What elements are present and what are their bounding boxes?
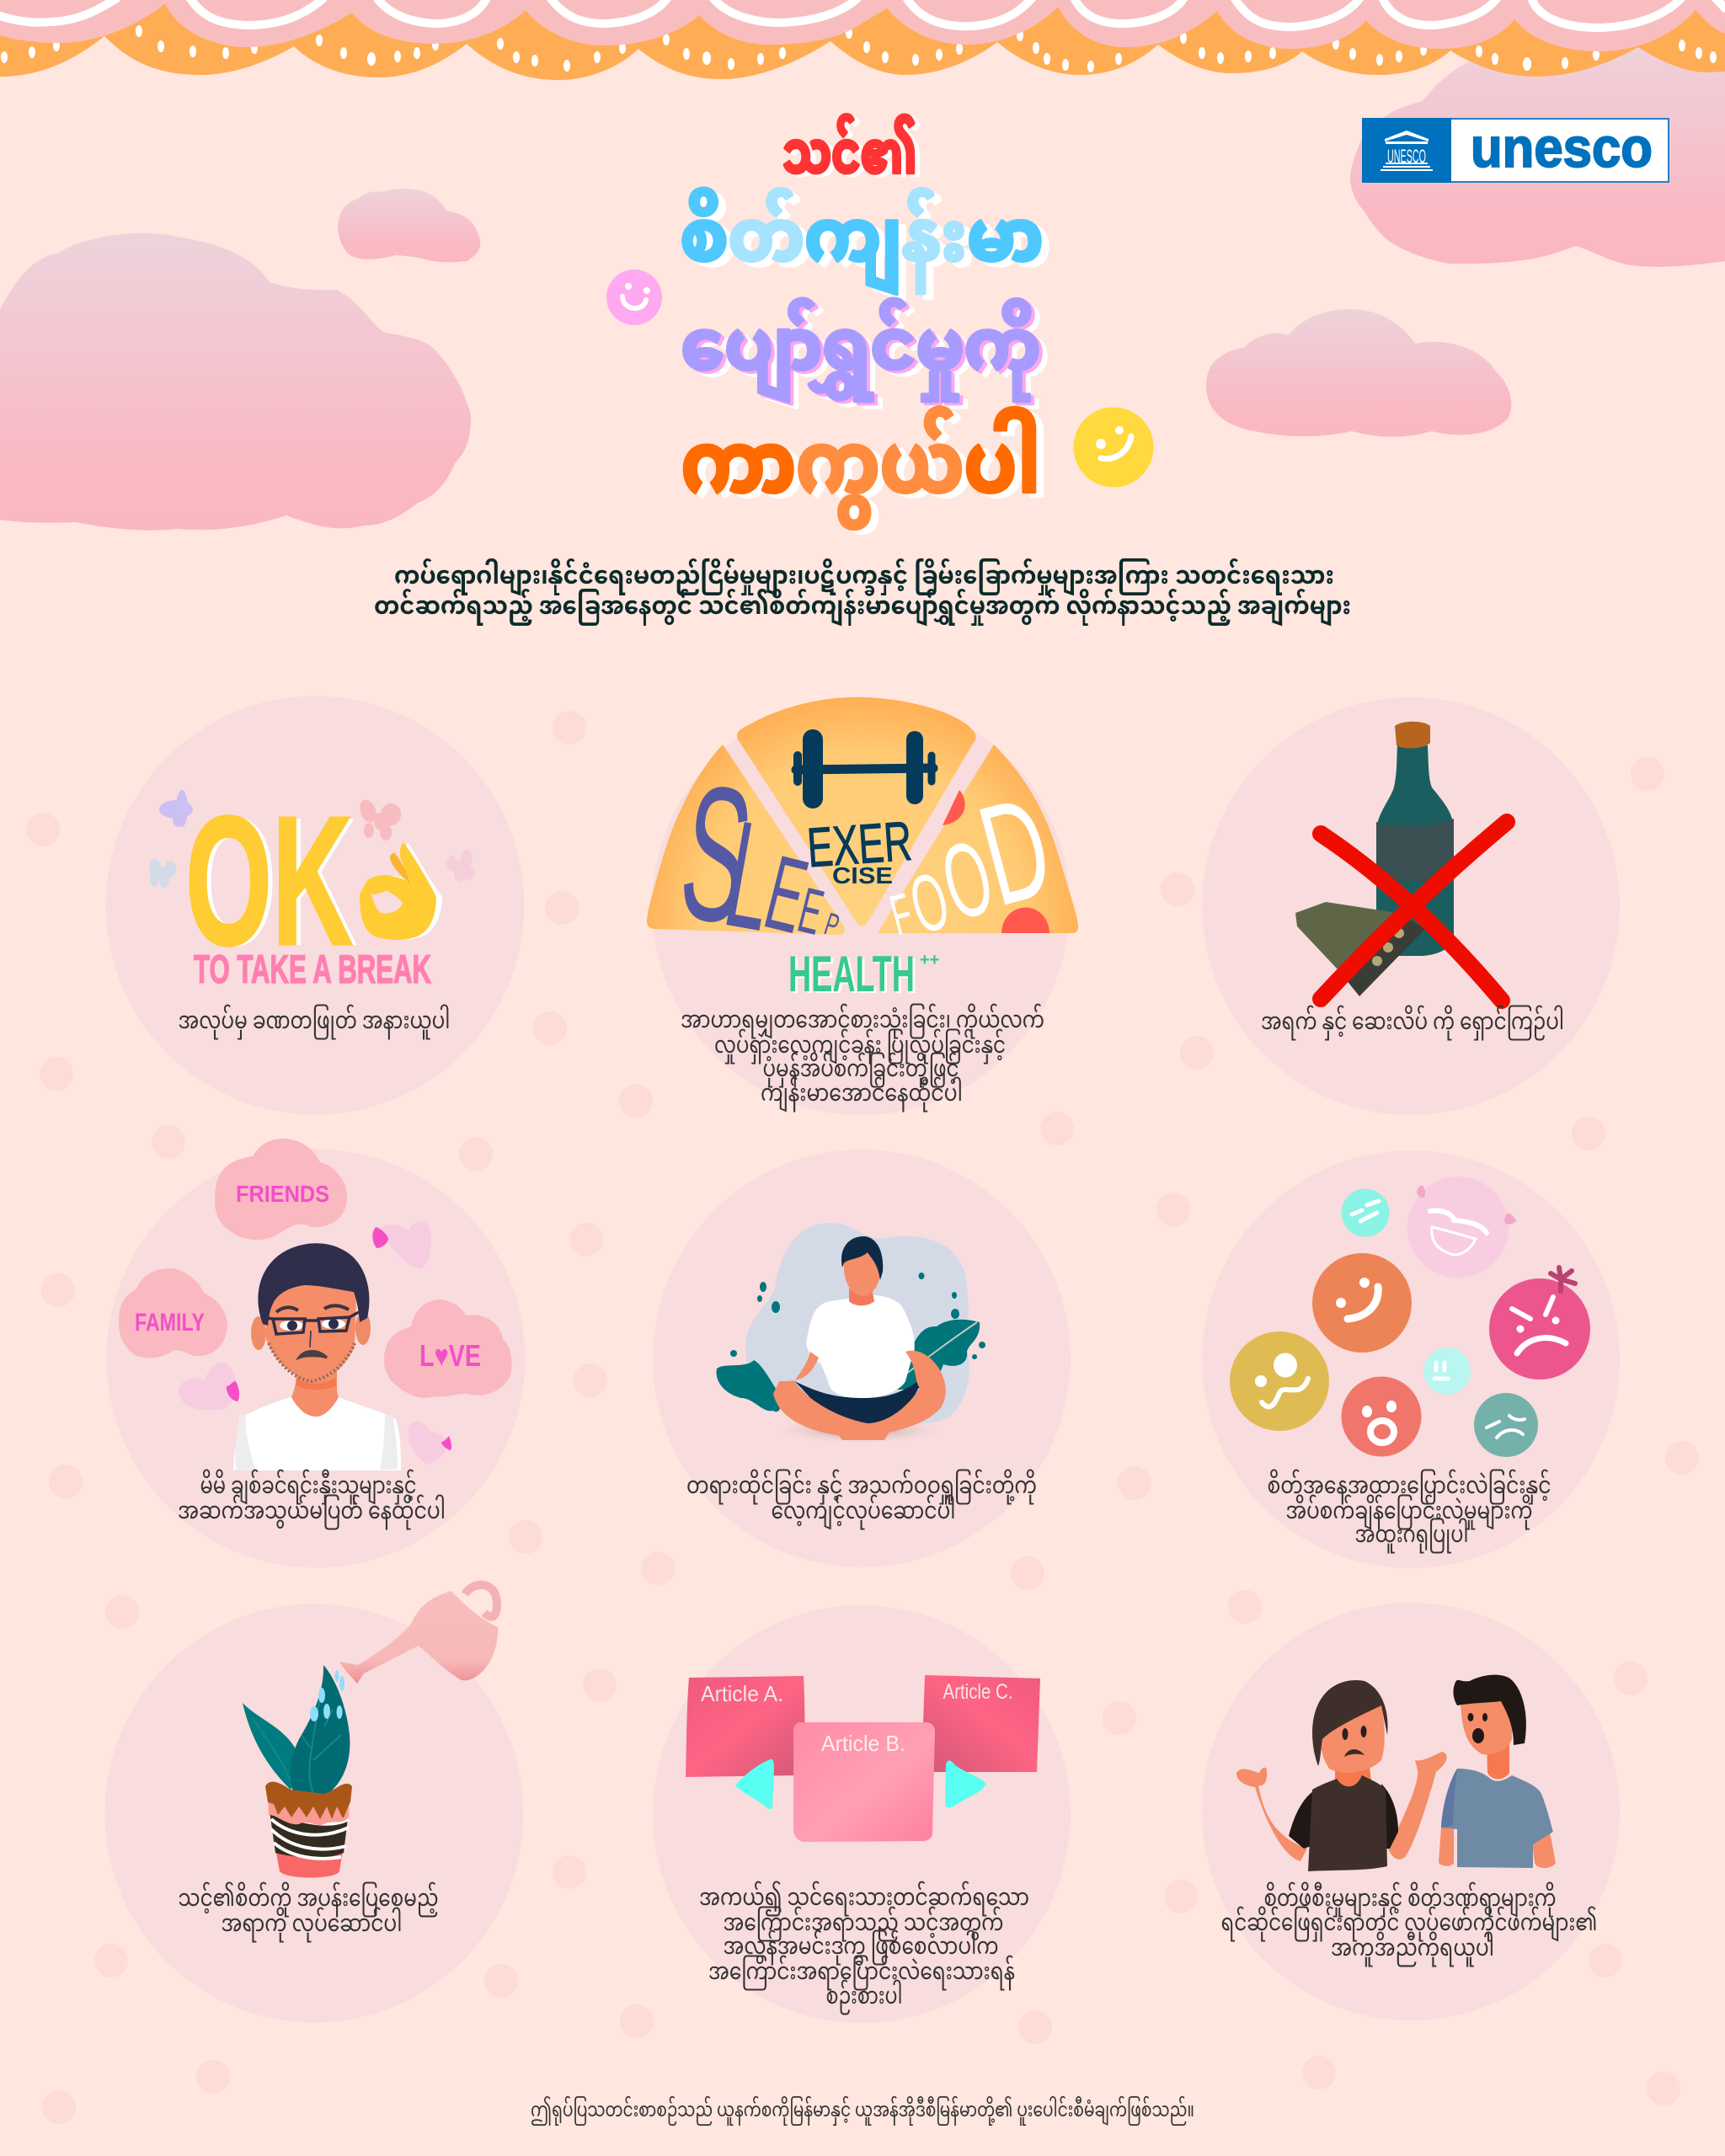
emoji: orange smile [1312,1253,1412,1353]
caption: အရာကို လုပ်ဆောင်ပါ [221,1901,403,1952]
icon: watering can [339,1585,498,1684]
cloud: family: FAMILY [135,1309,205,1337]
caption: ကျန်းမာအောင်နေထိုင်ပါ [761,1070,963,1122]
icon: ok hand [360,842,442,940]
header: orange scalloped bunting [0,0,1725,80]
caption: အိပ်စက်ချိန်ပြောင်းလဲမှုများကို [1285,1488,1533,1540]
illustration: meditating person [717,1223,985,1444]
panel: meditation [653,1150,1071,1567]
OK lettering: OK [185,779,353,984]
title line 4: ကာကွယ်ပါ [681,381,1041,564]
card: article C: Article C. [943,1680,1012,1704]
torso [806,1295,915,1398]
icon: dumbbell [796,739,933,798]
cloud: top right [1350,34,1725,267]
cloud: love [384,1299,512,1398]
emoji: teal sad [1474,1393,1538,1457]
card: article A: Article A. [701,1681,783,1706]
icon: striped pot [265,1782,352,1878]
food lettering [884,766,1066,951]
title line 3: ပျော်ရွှင်မှုကို [689,283,1049,435]
caption: သင့်၏စိတ်ကို အပန်းပြေစေမည့် [179,1876,438,1927]
panel: seek colleague support [1202,1603,1620,2020]
neck [849,1289,874,1305]
pie: sleep wedge [647,744,845,935]
sleep lettering: P [820,906,843,944]
title line 3: ပျော်ရွှင်မှုကို [684,280,1044,432]
cloud: large left [0,233,471,531]
caption [178,1463,446,1540]
caption: အကြောင်းအရာသည် သင့်အတွက် [723,1900,1004,1951]
panel: avoid alcohol and tobacco [1202,697,1620,1115]
food lettering: D [964,766,1066,937]
sleep lettering [670,744,843,965]
caption: အကူအညီကိုရယူပါ [1331,1925,1494,1977]
panel: change assignment [653,1605,1071,2025]
card: article B: Article B. [821,1731,905,1756]
caption: စိတ်အနေအထားပြောင်းလဲခြင်းနှင့် [1267,1463,1551,1514]
emoji: angry pink [1489,1267,1590,1380]
caption: အလွန်အမင်းဒုက္ခ ဖြစ်စေလာပါက [723,1924,999,1975]
caption: အာဟာရမျှတအောင်စားသုံးခြင်း၊ ကိုယ်လက် [681,997,1044,1049]
health lettering: HEALTH [788,946,915,1002]
caption: အကယ်၍ သင်ရေးသားတင်ဆက်ရသော [699,1875,1029,1926]
caption [1221,1876,1597,1977]
caption: အကြောင်းအရာပြောင်းလဲရေးသားရန် [708,1949,1015,2000]
cloud: friends: FRIENDS [236,1181,329,1207]
icon: hearts [179,1221,451,1464]
emoji: pink laughing [1407,1177,1516,1278]
footer: ဤရုပ်ပြသတင်းစာစဉ်သည် ယူနက်စကိုမြန်မာနှင့် ယူအန်အိုဒီစီမြန်မာတို့၏ ပူးပေါင်းစီမံချက်ဖြစ်သည်။ [531,2089,1194,2134]
icon: temple: UNESCO [1387,147,1426,167]
health lettering: ++ [920,951,939,969]
exercise lettering [805,809,914,889]
title [681,98,1051,568]
caption: လေ့ကျင့်လုပ်ဆောင်ပါ [772,1488,955,1540]
caption [1267,1463,1551,1563]
arrow: left [735,1759,774,1809]
water drops [310,1670,344,1721]
sleep lettering: S [670,744,763,965]
exercise lettering: EXER [805,809,914,878]
caption: အလုပ်မှ ခဏတဖြုတ် အနားယူပါ [179,998,450,1049]
panel: do what relaxes you [104,1585,524,2023]
cloud: small upper middle [338,189,480,262]
sleep lettering: E [755,833,818,955]
icon: cigarette pack [1295,902,1425,996]
arms and legs [773,1351,946,1436]
health lettering: HEALTH [791,947,917,1004]
title line 3: ပျော်ရွှင်မှုကို [681,277,1041,430]
pie: exercise wedge [737,697,976,926]
panel: take a break [106,696,524,1115]
wordmark: unesco [1471,116,1653,179]
caption: ရင်ဆိုင်ဖြေရှင်းရာတွင် လုပ်ဖော်ကိုင်ဖက်များ၏ [1221,1900,1597,1951]
panel: healthy lifestyle [647,697,1078,1122]
caption: အရက် နှင့် ဆေးလိပ် ကို ရှောင်ကြဉ်ပါ [1261,999,1564,1050]
title line 1: သင်၏ [782,98,917,222]
sleep lettering: L [714,789,785,963]
subtitle [374,550,1351,636]
caption: လှုပ်ရှားလေ့ကျင့်ခန်း ပြုလုပ်ခြင်းနှင့် [714,1022,1006,1074]
title line 1: သင်၏ [788,100,922,225]
card: article B [793,1722,935,1842]
sleep lettering: E [792,874,830,948]
illustration: woman [1236,1680,1447,1871]
caption: စိတ်ဖိစီးမှုများနှင့် စိတ်ဒဏ်ရာများကို [1263,1876,1557,1927]
title line 2: စိတ်ကျန်းမာ [687,173,1051,327]
emoji: coral surprised [1341,1376,1422,1457]
card: article C [921,1675,1040,1772]
cloud: friends [215,1139,347,1240]
caption: ပုံမှန်အိပ်စက်ခြင်းတို့ဖြင့် [763,1046,959,1097]
header: pink scallops [0,0,1725,51]
OK lettering: OK [190,780,358,985]
head [844,1239,881,1296]
leaf right [892,1320,980,1390]
icon: bottle [1376,722,1454,956]
cloud: right middle [1206,309,1511,437]
logo: UNESCO [1362,116,1669,183]
icon: butterflies [149,790,474,888]
food lettering: O [901,856,958,951]
food lettering: F [884,880,919,948]
subtitle: တင်ဆက်ရသည့် အခြေအနေတွင် သင်၏စိတ်ကျန်းမာပျော်ရွှင်မှုအတွက် လိုက်နာသင့်သည့် အချက်များ [374,580,1351,636]
caption: မိမိ ချစ်ခင်ရင်းနှီးသူများနှင့် [200,1463,416,1514]
caption: အဆက်အသွယ်မပြတ် နေထိုင်ပါ [178,1488,446,1540]
caption [179,1876,438,1952]
cloud: family [119,1268,227,1358]
panel: mood changes [1202,1150,1620,1568]
emoji: teal dashes [1341,1189,1390,1236]
header dots [1,25,1717,72]
tagline: TO TAKE A BREAK [194,947,431,991]
emoji: pale neutral [1423,1348,1471,1395]
exercise lettering: CISE [832,862,893,889]
background dots [26,711,1699,2124]
emoji: yellow wavy [1230,1331,1329,1431]
icon: pink smiley [606,270,662,325]
subtitle: ကပ်ရောဂါများ၊နိုင်ငံရေးမတည်ငြိမ်မှုများ၊ပဋိပက္ခနှင့် ခြိမ်းခြောက်မှုများအကြား သတင်းရေးသား [394,550,1334,606]
title line 2: စိတ်ကျန်းမာ [681,168,1043,322]
card: article A [686,1676,805,1777]
illustration: man [1439,1675,1556,1868]
caption [686,1463,1037,1540]
caption: စဉ်းစားပါ [825,1973,903,2025]
arrow: right [945,1760,986,1807]
caption [681,997,1044,1122]
caption: အထူးဂရုပြုပါ [1354,1512,1469,1563]
leaf left [717,1360,781,1412]
caption: တရားထိုင်ခြင်း နှင့် အသက်ဝဝရှူခြင်းတို့ကို [686,1463,1037,1514]
icon: plant leaves [243,1665,350,1796]
icon: temple [1381,131,1433,171]
food lettering: O [931,819,1005,943]
illustration: man with glasses [233,1243,401,1470]
header white loops [0,0,1725,28]
shorts [794,1379,922,1423]
icon: yellow smiley [1073,408,1154,487]
caption [699,1875,1029,2025]
title line 4: ကာကွယ်ပါ [689,385,1048,568]
food toppings [943,790,1049,933]
panel: stay connected [106,1139,526,1568]
pie: food wedge [878,744,1078,933]
icon: red cross [1321,822,1507,1001]
cloud: love: L♥VE [419,1338,481,1373]
